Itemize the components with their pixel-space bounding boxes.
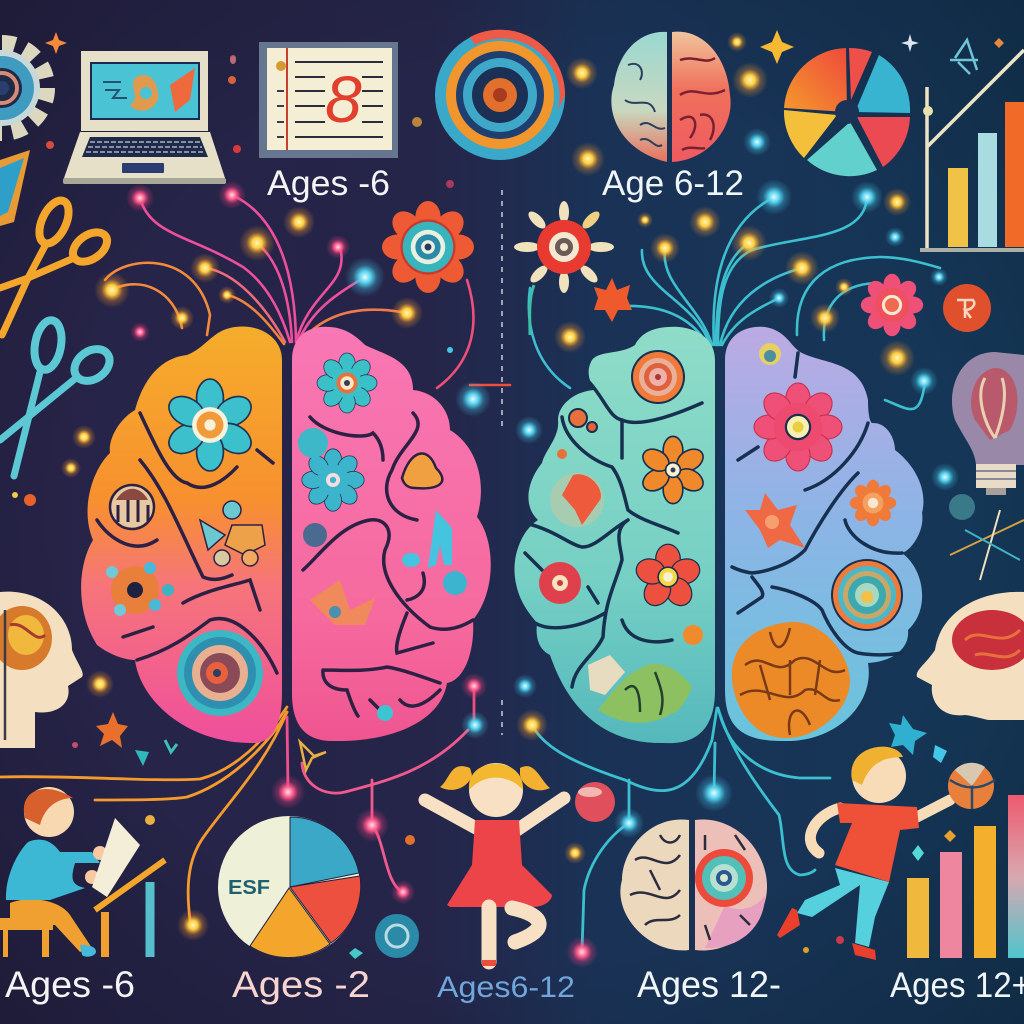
icon: round badge [375,914,419,958]
flower: red lower [633,544,703,611]
flower: orange far right [943,284,991,332]
icon: rainbow target [831,559,903,631]
icon: top brain [611,32,731,162]
icon: concentric target [435,30,565,160]
icon: orange dot [683,625,703,645]
icon: small red leaf [557,409,597,459]
icon: sketch motif [310,580,375,625]
icon: red arrow motif [550,473,604,527]
right brain [514,327,923,743]
icon: dome motif [110,485,154,529]
flower: coral star [745,493,805,548]
flower: teal right lower [302,449,364,511]
icon: teal scissors [0,318,116,476]
icon: green leaf [588,655,692,723]
central divider [501,190,503,735]
flower: teal left [164,379,256,471]
flower: top left [382,201,474,293]
fissures right [732,353,902,655]
pie label: ESF [228,877,270,899]
fissures left [97,413,277,673]
flower: teal right upper [317,353,377,413]
icon: running boy [777,747,995,960]
icon: notebook: 8 [325,62,362,136]
flower: orange small [850,480,896,526]
icon: ring motif [106,562,174,616]
icon: orange mini brain [732,622,850,738]
icon: red ball [575,782,615,822]
label: Ages -6 bottom: Ages -6 [5,964,135,1005]
flower: red right [861,274,923,336]
icon: lower concentric [177,630,263,716]
flower: sun orange [594,278,632,322]
flower: orange [639,436,707,504]
fissures left [525,383,702,687]
stem: white flower [530,285,534,335]
icon: notebook [259,42,398,158]
left brain [81,327,491,743]
label: Ages 12 bottom: Ages 12- [637,964,781,1005]
icon: orange scissors [0,196,112,335]
icon: gear [0,44,46,132]
icon: laptop [63,51,226,184]
right hemisphere violet-blue [725,327,923,741]
heading: Ages -6 top: Ages -6 [267,164,390,203]
left hemisphere orange-pink [81,327,282,743]
icon: small swirl top [759,343,781,365]
flower: big red [754,383,842,471]
icon: teal-orange motif [200,501,265,566]
wires: lower [0,690,830,950]
icon: small teal dots [298,428,467,721]
icon: pink circle [539,562,581,604]
chart: top bars [920,50,1024,252]
heading: Age 6-12 top: Age 6-12 [602,164,744,203]
icon: dancing girl [425,763,564,963]
label: Ages -2 bottom: Ages -2 [232,964,370,1005]
icon: bottom brain [620,820,767,950]
fissures right [303,413,473,716]
chart: bottom bars [907,795,1024,958]
chart: top pie [784,48,910,176]
icon: lightbulb [952,352,1024,495]
icon: left head profile [0,592,83,748]
chart: bottom pie [218,816,361,958]
icon: scattered lines right [949,494,1024,580]
wires: right brain top [529,197,940,409]
icon: reading boy [0,787,165,957]
icon: teal music shape [402,510,452,568]
right hemisphere pink [292,327,491,741]
icon: right head profile [917,592,1024,720]
flower: white petal top [514,201,614,293]
icon: yellow leaf [402,453,442,488]
wires: left brain top [105,195,510,388]
icon: orange spiral [631,350,685,404]
label: Ages6-12 bottom: Ages6-12 [437,971,575,1004]
icon: book [0,150,30,226]
left hemisphere teal [514,327,715,743]
